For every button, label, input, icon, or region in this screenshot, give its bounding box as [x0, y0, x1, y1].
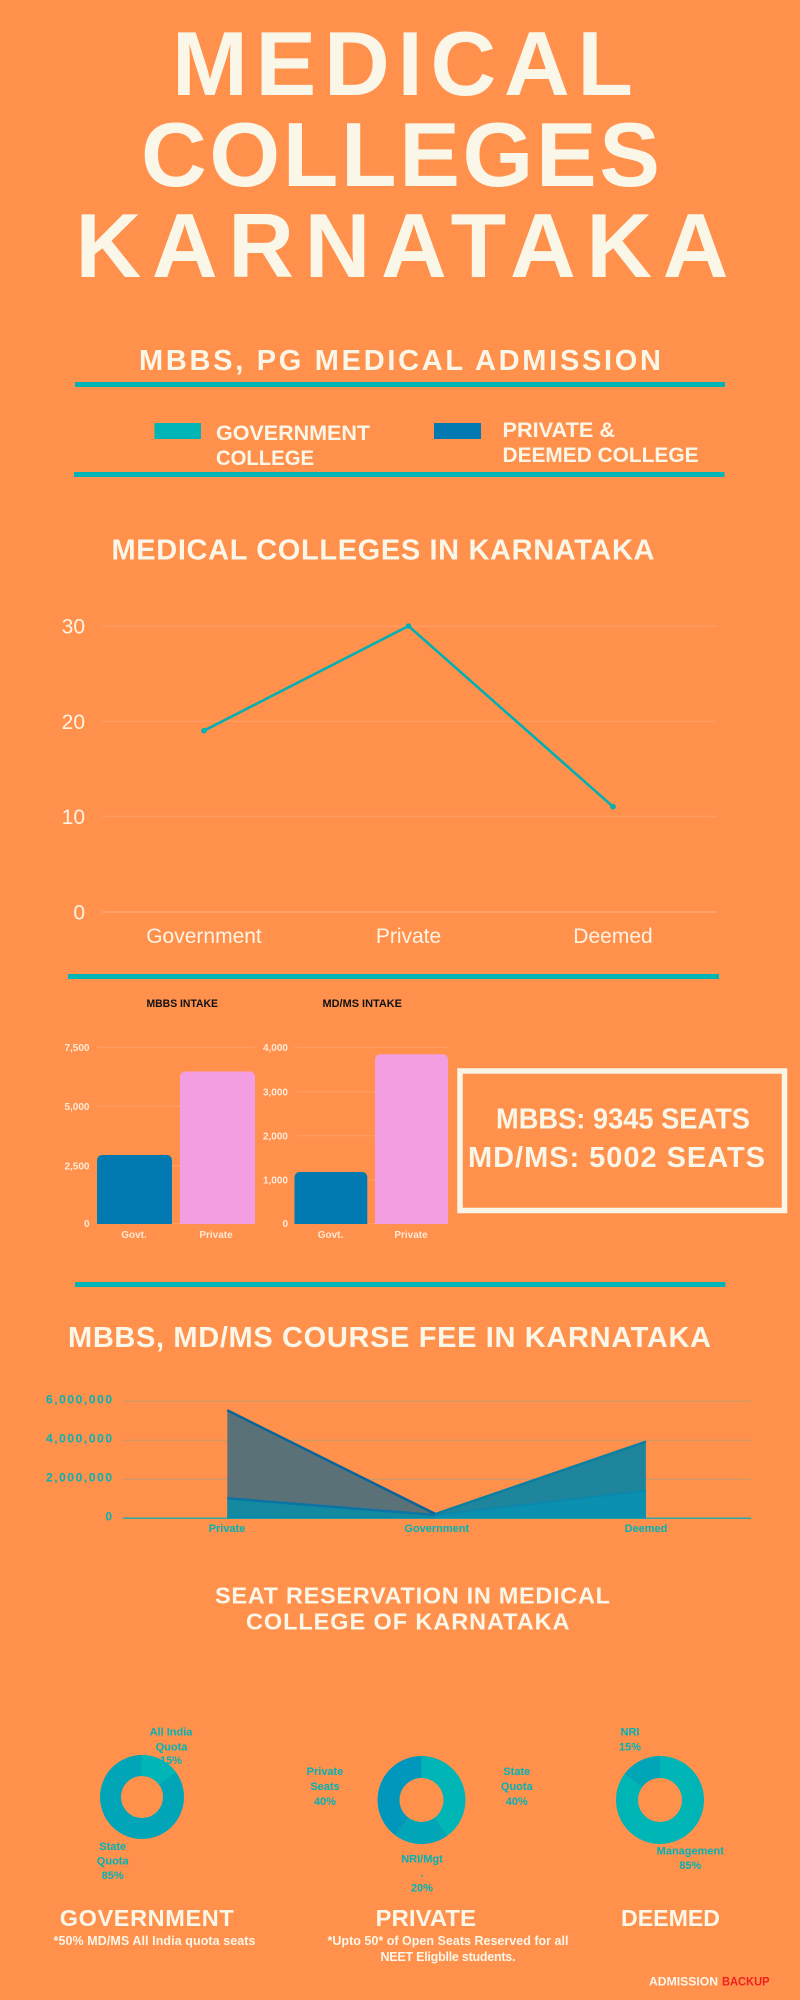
bar chart: MD/MS intake: 1,000 [263, 1176, 288, 1186]
brand logo [649, 1975, 770, 1989]
divider top of legend [75, 382, 725, 387]
donut: government: State [99, 1841, 126, 1853]
donut: deemed: Management [657, 1845, 724, 1857]
bar chart: MBBS intake: MBBS INTAKE [146, 998, 218, 1010]
bar chart: MD/MS intake: 3,000 [263, 1088, 288, 1098]
bar chart: MD/MS intake [263, 998, 448, 1241]
donut: private: Seats [310, 1781, 340, 1793]
bar chart: MD/MS intake: 4,000 [263, 1043, 288, 1054]
donut: private [307, 1766, 534, 1895]
brand logo: ADMISSION [649, 1975, 718, 1989]
line chart: number of colleges: Government [146, 925, 262, 948]
legend: DEEMED COLLEGE [502, 443, 698, 467]
donut: government [97, 1727, 193, 1882]
title: KARNATAKA [76, 196, 728, 297]
subtitle: MBBS, PG MEDICAL ADMISSION [139, 345, 661, 377]
heading: government: GOVERNMENT [60, 1905, 234, 1931]
legend: GOVERNMENT [216, 421, 370, 445]
area chart: course fee: 2,000,000 [46, 1471, 112, 1485]
line chart: number of colleges: Private [376, 925, 441, 948]
note: government: *50% MD/MS All India quota seats [54, 1934, 256, 1948]
legend [154, 418, 698, 470]
heading: seat reservation: COLLEGE OF KARNATAKA [246, 1608, 570, 1634]
bar chart: MBBS intake [64, 998, 255, 1241]
donut: government: 85% [102, 1870, 124, 1882]
area chart: course fee: Private [209, 1523, 245, 1535]
donut: government: Quota [156, 1742, 188, 1754]
line chart: number of colleges: Deemed [573, 925, 653, 948]
bar chart: MD/MS intake: MD/MS INTAKE [322, 998, 402, 1010]
bar chart: MD/MS intake: 2,000 [263, 1132, 288, 1142]
donut: private: 40% [314, 1796, 336, 1808]
bar chart: MBBS intake: 7,500 [64, 1043, 90, 1054]
donut: deemed: 15% [619, 1742, 641, 1754]
title: COLLEGES [141, 105, 660, 206]
donut: private: NRI/Mgt [401, 1853, 443, 1865]
line chart: number of colleges: 0 [73, 902, 85, 924]
callout: total seats [460, 1071, 784, 1210]
area chart: course fee: 6,000,000 [46, 1392, 112, 1406]
area chart: course fee [46, 1392, 751, 1535]
note: private: NEET Eligblle students. [380, 1950, 516, 1964]
brand logo: BACKUP [722, 1975, 770, 1989]
donut: deemed: 85% [679, 1860, 702, 1872]
bar chart: MBBS intake: 5,000 [64, 1102, 90, 1113]
legend: PRIVATE & [502, 418, 615, 442]
line chart: number of colleges [62, 616, 716, 948]
divider [68, 974, 719, 979]
line chart: number of colleges: 10 [62, 806, 85, 829]
bar chart: MD/MS intake: 0 [282, 1219, 288, 1230]
callout: total seats: MD/MS: 5002 SEATS [468, 1142, 765, 1174]
heading: seat reservation: SEAT RESERVATION IN MEDICAL [215, 1582, 610, 1608]
donut: deemed: NRI [621, 1727, 639, 1739]
line chart: number of colleges: 20 [62, 711, 85, 734]
donut: private: Private [307, 1766, 343, 1778]
title [76, 14, 728, 297]
heading: deemed: DEEMED [621, 1905, 720, 1931]
donut: private: State [503, 1766, 530, 1778]
line chart: number of colleges: 30 [62, 616, 85, 638]
bar chart: MBBS intake: Govt. [121, 1230, 147, 1241]
divider bottom of legend [74, 472, 724, 477]
donut: private: 40% [506, 1796, 528, 1808]
heading: seat reservation [215, 1582, 610, 1634]
note: private [328, 1934, 568, 1964]
area chart: course fee: 0 [105, 1510, 112, 1524]
donut: private: Quota [501, 1781, 534, 1793]
heading: medical colleges: MEDICAL COLLEGES IN KARNATAKA [112, 534, 655, 566]
area chart: course fee: Government [404, 1523, 470, 1535]
area chart: course fee: 4,000,000 [46, 1432, 112, 1446]
donut: private: 20% [411, 1883, 433, 1895]
bar chart: MD/MS intake: Govt. [318, 1230, 343, 1241]
title: MEDICAL [172, 14, 633, 115]
bar chart: MBBS intake: Private [199, 1230, 233, 1241]
bar chart: MD/MS intake: Private [394, 1230, 428, 1241]
area chart: course fee: Deemed [625, 1523, 667, 1535]
donut: government: Quota [97, 1856, 129, 1868]
bar chart: MBBS intake: 0 [84, 1219, 90, 1230]
donut: private: . [420, 1868, 424, 1880]
heading: course fee: MBBS, MD/MS COURSE FEE IN KARNATAKA [68, 1322, 711, 1354]
callout: total seats: MBBS: 9345 SEATS [496, 1104, 750, 1136]
bar chart: MBBS intake: 2,500 [64, 1162, 90, 1172]
heading: private: PRIVATE [376, 1905, 476, 1931]
legend: COLLEGE [216, 446, 314, 470]
donut: deemed [619, 1727, 724, 1872]
note: private: *Upto 50* of Open Seats Reserved for all [328, 1934, 568, 1948]
divider [75, 1282, 726, 1287]
donut: government: All India [150, 1727, 193, 1739]
donut: government: 15% [160, 1755, 182, 1767]
